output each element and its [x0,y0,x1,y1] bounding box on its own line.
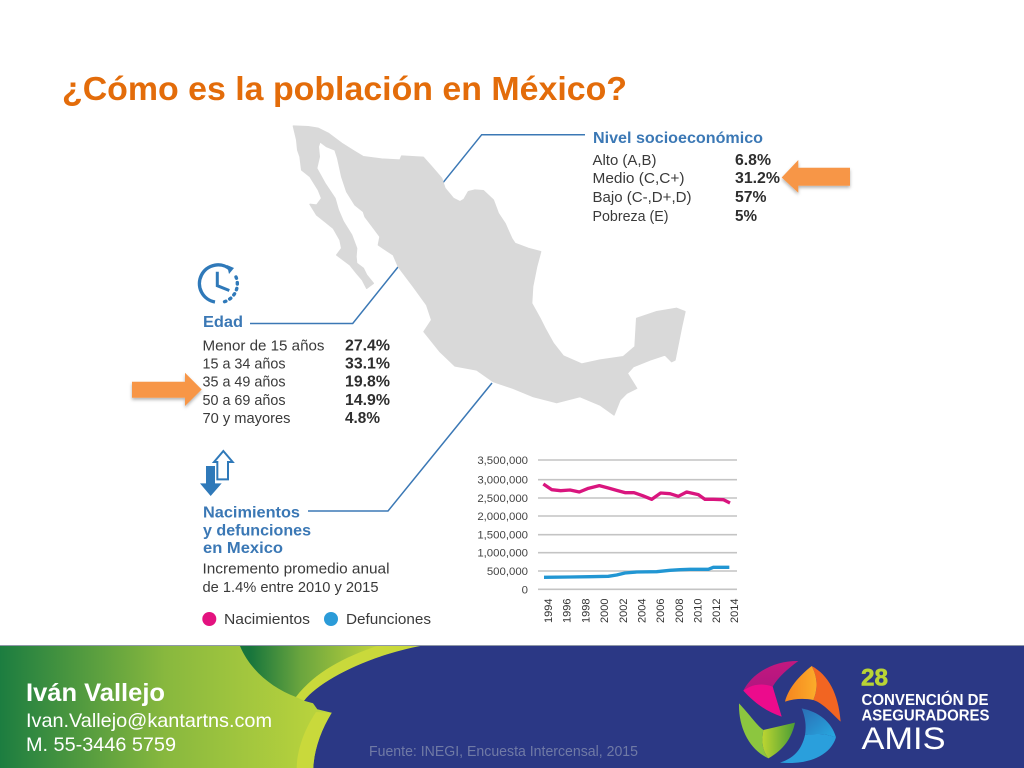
footer: green panel [0,645,423,768]
row: poverty [592,208,757,225]
presenter contact: Iván Vallejo [26,679,165,707]
legend: deaths: Defunciones [346,611,431,628]
heading: births and deaths [203,505,311,557]
y axis labels: 3,500,000 [477,455,528,467]
title: ¿Cómo es la población en México? [62,71,627,108]
row: high: 6.8% [735,152,771,169]
row: low: 57% [735,189,767,206]
row: 15 to 34 [202,356,390,372]
arrow: points at age rows [132,373,202,406]
logo text [861,665,990,756]
row: 50 to 69 [202,392,390,409]
x axis labels: 2006 [655,599,667,623]
row: poverty: 5% [735,208,757,225]
logo text: CONVENCIÓN DE [862,691,988,709]
row: 35 to 49: 35 a 49 años [202,374,286,390]
y axis labels: 2,000,000 [477,511,528,523]
presenter contact: Ivan.Vallejo@kantartns.com [26,710,272,732]
legend: births: Nacimientos [224,611,310,628]
row: low: Bajo (C-,D+,D) [592,189,692,206]
footer: lime band [296,646,423,701]
x axis labels: 2008 [674,599,686,623]
row: 35 to 49 [202,374,390,390]
heading: age: Edad [203,314,243,331]
heading: births and deaths: Nacimientos [203,505,300,522]
arrow: points at middle level [782,160,850,193]
description: Incremento promedio anual [202,560,390,577]
connector: socioeconomic level [443,135,585,183]
heading: births and deaths: en Mexico [203,540,283,557]
row: under 15 [202,338,390,355]
source note: Fuente: INEGI, Encuesta Intercensal, 2015 [369,744,638,760]
row: low [592,189,767,206]
row: 70 and over: 4.8% [345,410,380,427]
y axis labels [477,455,528,596]
heading: socioeconomic level: Nivel socioeconómico [593,130,763,147]
logo text: AMIS [862,720,946,756]
panel: age [202,314,390,427]
x axis labels: 2002 [618,599,630,623]
footer: lower lime band [297,712,332,768]
logo text: 28 [861,665,888,692]
petal: blue [780,708,836,763]
y axis labels: 3,000,000 [477,474,528,486]
x axis labels: 2010 [692,599,704,623]
x axis labels [543,599,741,623]
description [202,560,390,596]
y axis labels: 1,500,000 [477,530,528,542]
row: middle: 31.2% [735,170,780,187]
row: under 15: 27.4% [345,338,390,355]
y axis labels: 0 [522,584,528,596]
x axis labels: 2014 [729,599,741,623]
row: middle: Medio (C,C+) [592,170,684,187]
x axis labels: 1994 [543,599,555,623]
row: 50 to 69: 50 a 69 años [202,392,286,409]
connector: births and deaths [308,383,492,511]
description: de 1.4% entre 2010 y 2015 [202,579,378,596]
petal: magenta [743,661,798,717]
row: high: Alto (A,B) [592,152,656,169]
series: births [543,484,730,503]
panel: socioeconomic level [592,130,780,225]
row: 35 to 49: 19.8% [345,374,390,390]
petal: green [739,703,795,758]
petal: orange [785,666,841,722]
icon: clock [199,265,237,302]
footer: top line [0,645,1024,646]
row: high [592,152,771,169]
row: poverty: Pobreza (E) [592,208,668,225]
row: 70 and over: 70 y mayores [202,410,291,427]
presenter contact: M. 55-3446 5759 [26,734,176,756]
icon: up and down arrows [200,451,233,496]
x axis labels: 2000 [599,599,611,623]
row: middle [592,170,780,187]
row: under 15: Menor de 15 años [202,338,325,355]
row: 50 to 69: 14.9% [345,392,390,409]
footer band [0,645,1024,768]
logo text: ASEGURADORES [862,708,990,724]
x axis labels: 1996 [562,599,574,623]
x axis labels: 2004 [636,599,648,623]
logo mark [739,661,841,763]
heading: births and deaths: y defunciones [203,523,311,540]
x axis labels: 2012 [711,599,723,623]
connector: age [250,267,398,324]
y axis labels: 1,000,000 [477,548,528,560]
row: 15 to 34: 33.1% [345,356,390,372]
row: 15 to 34: 15 a 34 años [202,356,286,372]
presenter contact [26,679,272,756]
panel: births and deaths [202,505,431,628]
y axis labels: 2,500,000 [477,493,528,505]
map of Mexico [293,126,685,415]
series: deaths [544,567,729,577]
row: 70 and over [202,410,380,427]
x axis labels: 1998 [580,599,592,623]
y axis labels: 500,000 [487,566,528,578]
line chart [477,455,741,623]
footer: dark green leaf [240,646,377,697]
